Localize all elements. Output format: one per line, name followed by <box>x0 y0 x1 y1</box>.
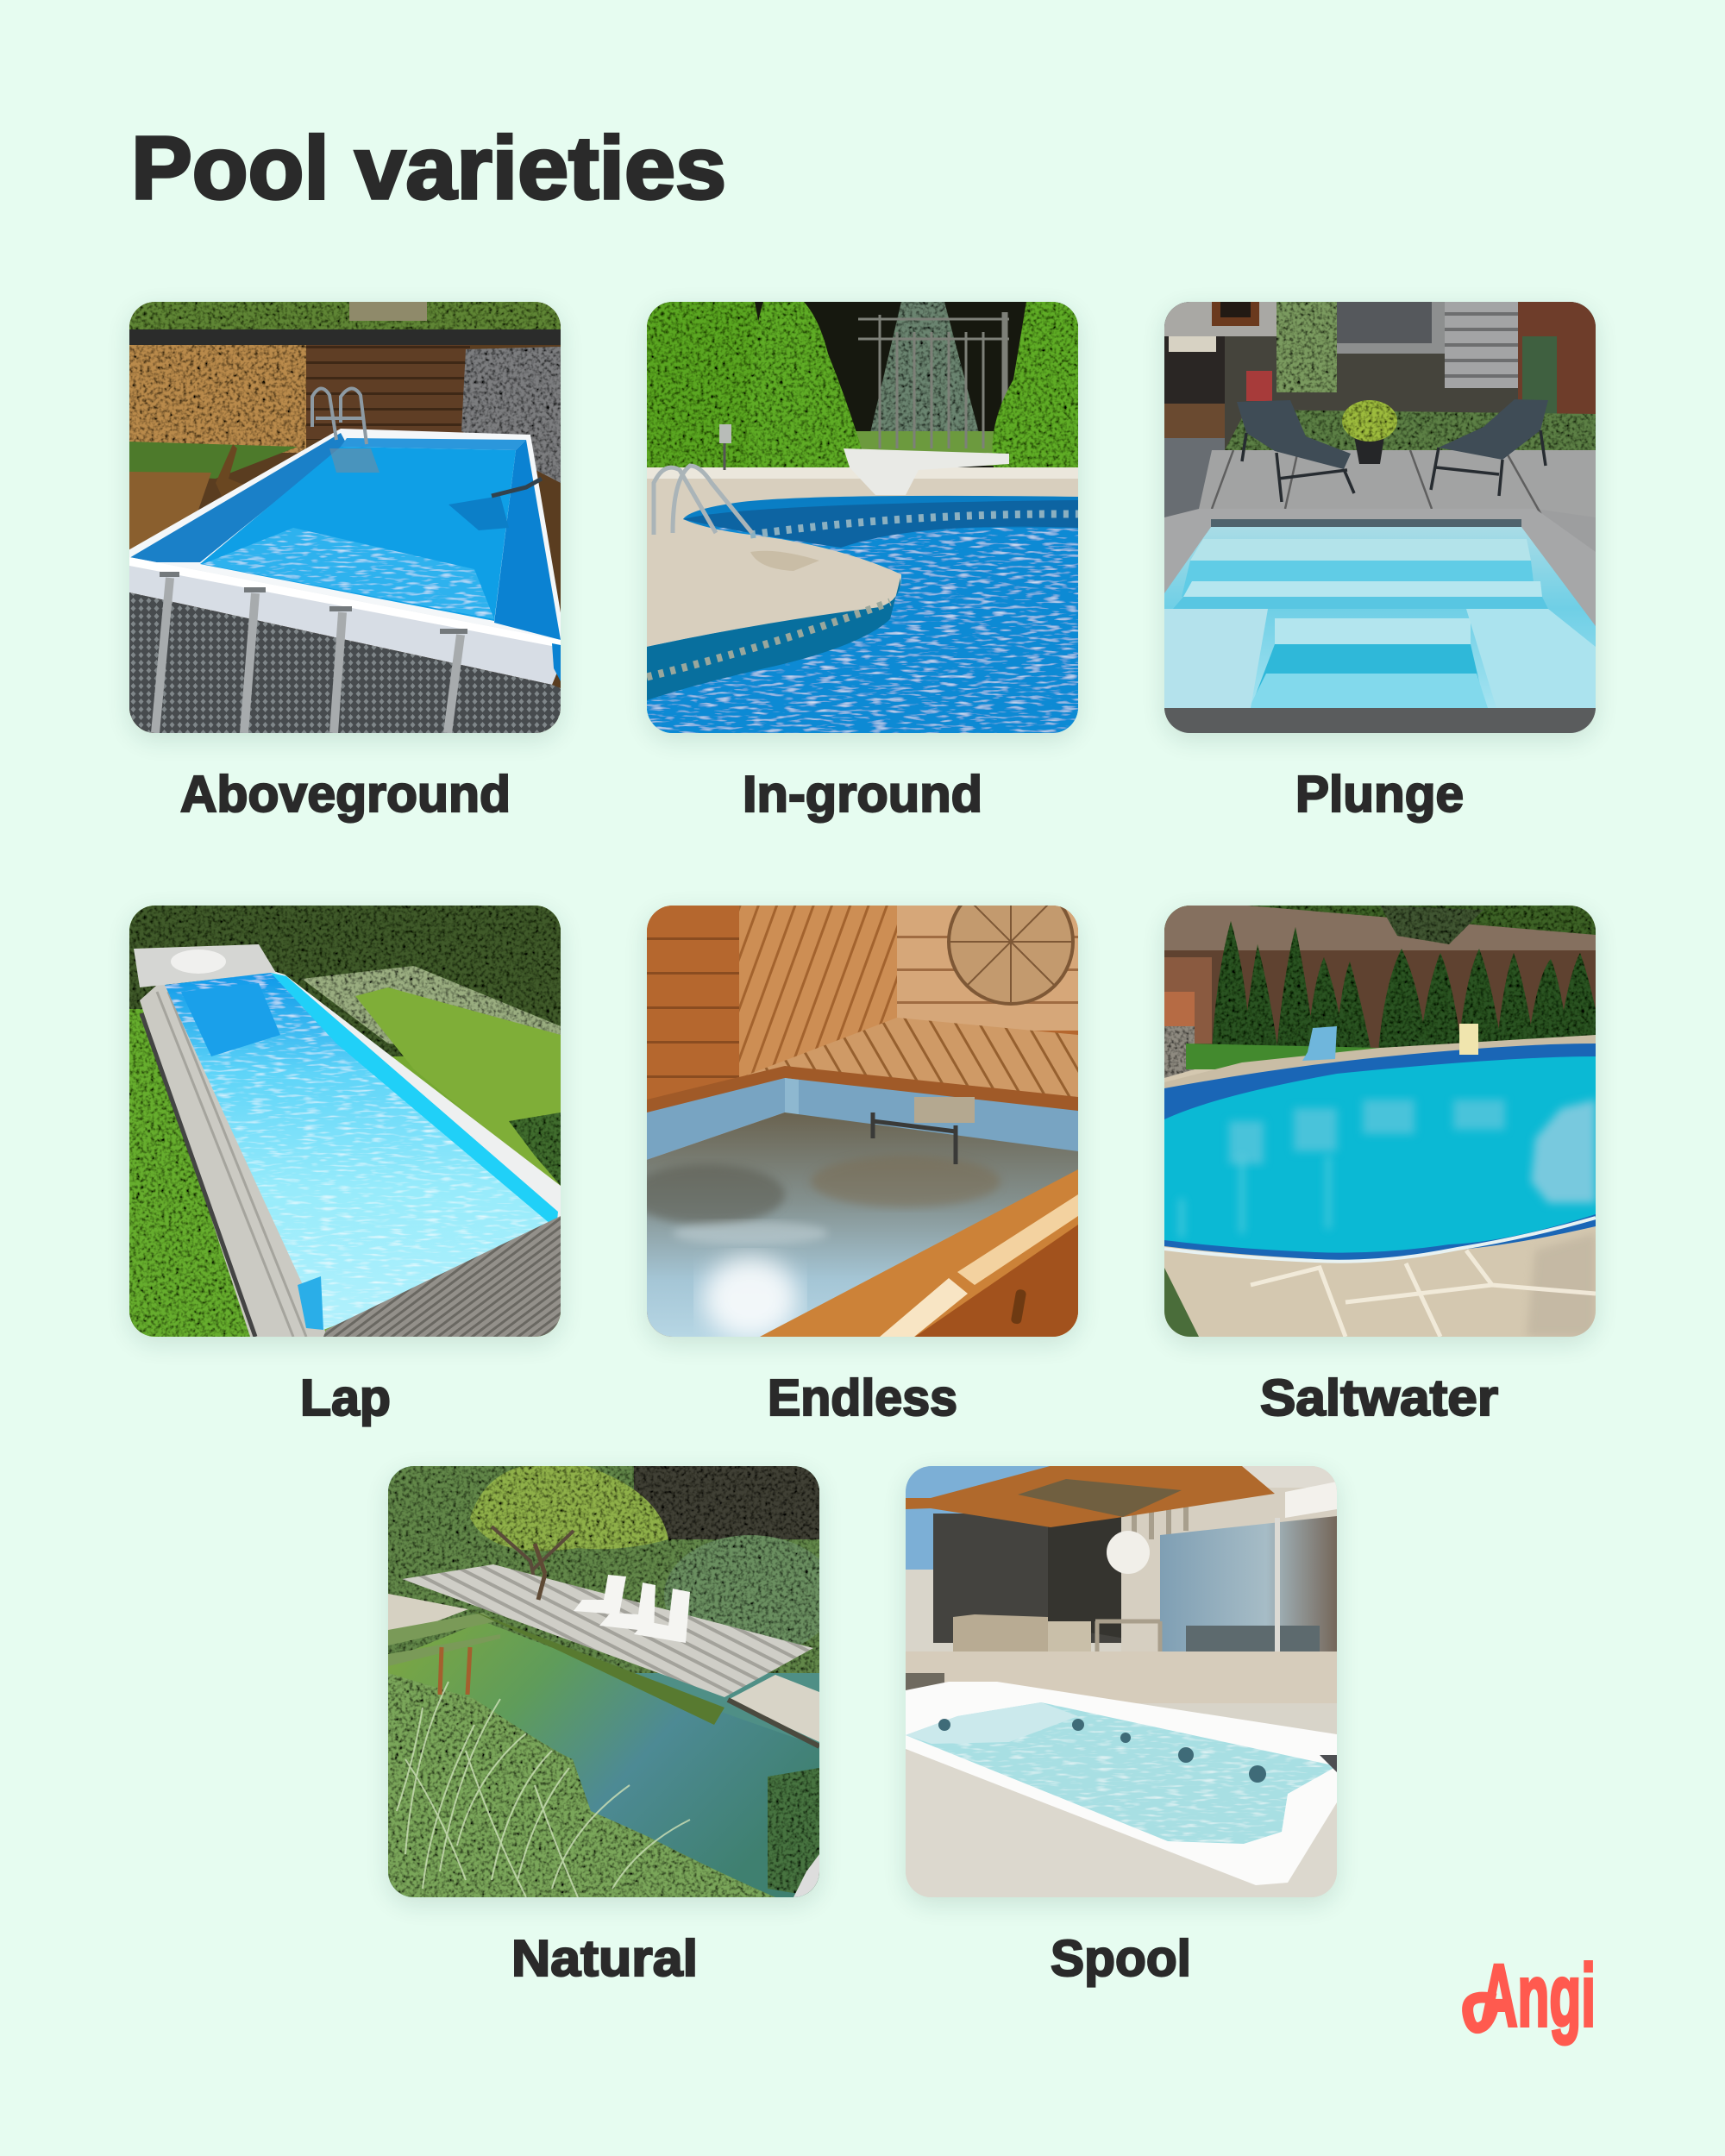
label: Natural: Natural <box>511 1930 698 1987</box>
label: Endless: Endless <box>768 1369 957 1426</box>
panel: In-ground <box>647 302 1078 823</box>
label: In-ground: In-ground <box>743 766 982 823</box>
photo: spool <box>906 1462 1337 1897</box>
label: Lap: Lap <box>300 1369 391 1426</box>
panel: Endless <box>630 880 1078 1426</box>
label: Spool: Spool <box>1051 1930 1191 1987</box>
panel: Lap <box>129 906 561 1426</box>
photo: aboveground pool <box>121 302 565 733</box>
title: Pool varieties <box>131 118 726 217</box>
panel: Saltwater <box>1164 906 1604 1426</box>
logo: Angi <box>1468 1946 1596 2045</box>
photo: in-ground pool <box>647 302 1078 733</box>
photo: plunge pool <box>1164 302 1596 733</box>
label: Plunge: Plunge <box>1295 766 1464 823</box>
panel: Spool <box>906 1462 1337 1987</box>
label: Saltwater: Saltwater <box>1260 1369 1498 1426</box>
logo: Angi: Angi <box>1480 1946 1596 2045</box>
label: Aboveground: Aboveground <box>180 766 511 823</box>
panel: Plunge <box>1164 302 1596 823</box>
photo: natural pool <box>388 1463 837 1897</box>
panel: Natural <box>388 1463 837 1987</box>
panel: Aboveground <box>121 302 565 823</box>
photo: saltwater pool <box>1164 906 1604 1337</box>
photo: endless pool <box>630 880 1078 1339</box>
photo: lap pool <box>129 906 561 1337</box>
